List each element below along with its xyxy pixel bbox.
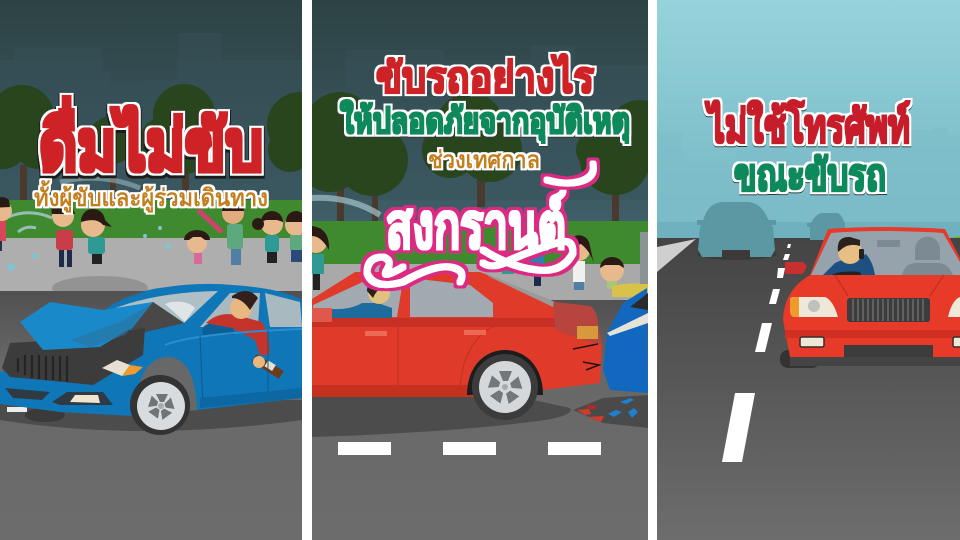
city skyline [312, 45, 648, 200]
blue car being hit [573, 288, 648, 428]
heading: drink don't drive: ดื่มไม่ขับ [39, 96, 263, 185]
city skyline [0, 33, 302, 200]
subheading: driver and passengers: ทั้งผู้ขับและผู้ร่วมเดินทาง [34, 179, 268, 213]
festival crowd [0, 197, 307, 271]
sidewalk [312, 264, 640, 300]
panel: how to drive safely [312, 0, 648, 540]
trees [312, 92, 648, 221]
subheading: while driving: ขณะขับรถ [734, 151, 886, 200]
road [312, 300, 648, 540]
city skyline [657, 125, 960, 240]
songkran logo: สงกรานต์ [386, 190, 566, 262]
sidewalk [0, 238, 302, 292]
subheading: festival period: ช่วงเทศกาล [428, 147, 540, 174]
daytime sky [657, 0, 960, 240]
water spray [8, 178, 140, 232]
water spray [312, 198, 380, 215]
heading: how to drive: ขับรถอย่างไร [376, 53, 594, 101]
festival crowd [305, 226, 648, 297]
panel: drink don't drive [0, 0, 333, 540]
distant car right [807, 213, 845, 240]
dusk sky [0, 0, 302, 200]
blue crashed car [0, 284, 302, 435]
red car, rear view from the side [312, 272, 602, 437]
trees [0, 84, 302, 200]
dusk sky [312, 0, 648, 240]
songkran logo [367, 164, 593, 285]
grass [312, 221, 648, 266]
distant car left [697, 202, 777, 260]
grass [0, 200, 302, 240]
curb [657, 239, 696, 272]
red car front view [780, 227, 960, 368]
road [657, 238, 960, 540]
lane markings [338, 442, 601, 455]
grass [950, 236, 960, 238]
crash smoke [52, 276, 148, 300]
road [0, 291, 302, 540]
subheading: safe from accidents: ให้ปลอดภัยจากอุบัติเหตุ [340, 99, 630, 144]
panel: no phone while driving [657, 0, 960, 540]
lane markings [722, 244, 791, 462]
